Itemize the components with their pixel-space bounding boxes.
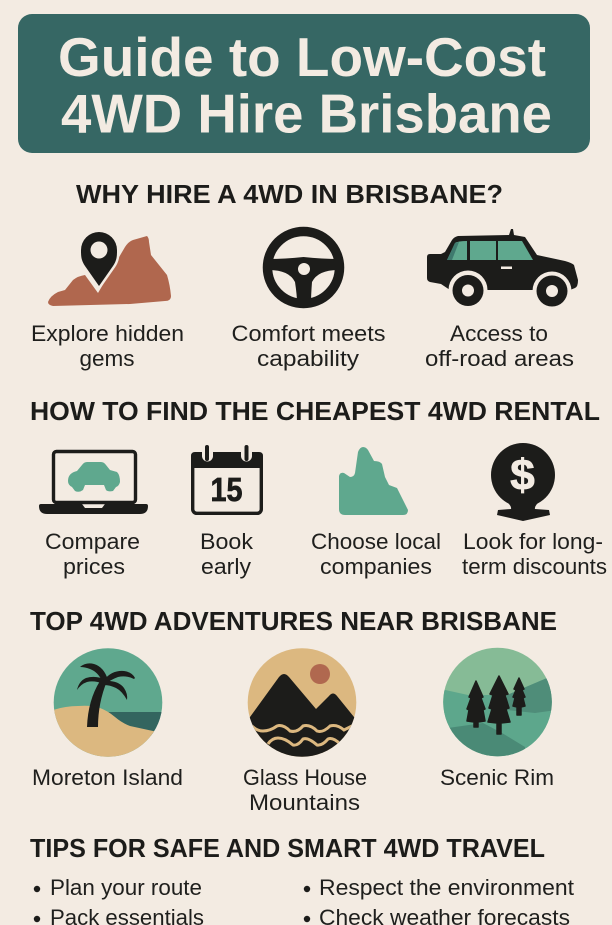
section: why hire a 4WD: gems: [80, 346, 134, 371]
icon: teal mountain: [339, 447, 408, 515]
section: top adventures: Mountains: [249, 790, 360, 815]
icon: dollar pin: $: [510, 451, 535, 500]
icon: Scenic Rim forest: [443, 648, 552, 756]
heading: top adventures: TOP 4WD ADVENTURES NEAR BRISBANE: [30, 606, 557, 636]
icon: laptop with car: [39, 452, 148, 514]
title banner: Guide to Low-Cost: [58, 26, 546, 88]
section: travel tips: [30, 833, 574, 925]
label: Scenic Rim: Scenic Rim: [440, 765, 554, 790]
label: choose local companies: Choose local: [311, 529, 441, 554]
section: why hire a 4WD: [31, 179, 580, 371]
icon: dollar pin: [491, 443, 555, 521]
section: why hire a 4WD: capability: [257, 346, 359, 371]
icon: palm tree beach: [54, 648, 162, 757]
heading: why hire: WHY HIRE A 4WD IN BRISBANE?: [76, 179, 503, 209]
label: Moreton Island: Moreton Island: [32, 765, 183, 790]
label: explore hidden gems: Explore hidden: [31, 321, 184, 346]
section: how to find the cheapest rental: companies: [320, 554, 432, 579]
label: book early: Book: [200, 529, 254, 554]
section: how to find the cheapest rental: prices: [63, 554, 125, 579]
section: how to find the cheapest rental: [30, 396, 607, 579]
icon: calendar: [191, 445, 263, 513]
heading: cheapest rental: HOW TO FIND THE CHEAPEST 4WD RENTAL: [30, 396, 600, 426]
icon: mountain with map pin: [48, 232, 171, 306]
icon: Glass House Mountains: [246, 646, 358, 762]
section: how to find the cheapest rental: early: [201, 554, 251, 579]
section: why hire a 4WD: off-road areas: [425, 346, 574, 371]
tip: plan your route: Plan your route: [50, 875, 202, 900]
section: how to find the cheapest rental: term discounts: [462, 554, 607, 579]
icon: calendar: 15: [210, 471, 242, 508]
label: Glass House Mountains: Glass House: [243, 765, 367, 790]
label: comfort meets capability: Comfort meets: [232, 321, 386, 346]
title banner: 4WD Hire Brisbane: [61, 82, 552, 144]
tip: respect the environment: Respect the environment: [319, 875, 574, 900]
label: look for long-term discounts: Look for long-: [463, 529, 603, 554]
heading: travel tips: TIPS FOR SAFE AND SMART 4WD TRAVEL: [30, 833, 545, 863]
icon: steering wheel: [268, 232, 340, 304]
label: access to off-road areas: Access to: [450, 321, 548, 346]
label: compare prices: Compare: [45, 529, 140, 554]
title banner: [18, 14, 590, 153]
icon: 4WD vehicle: [427, 229, 580, 310]
section: top adventures: [30, 606, 557, 815]
